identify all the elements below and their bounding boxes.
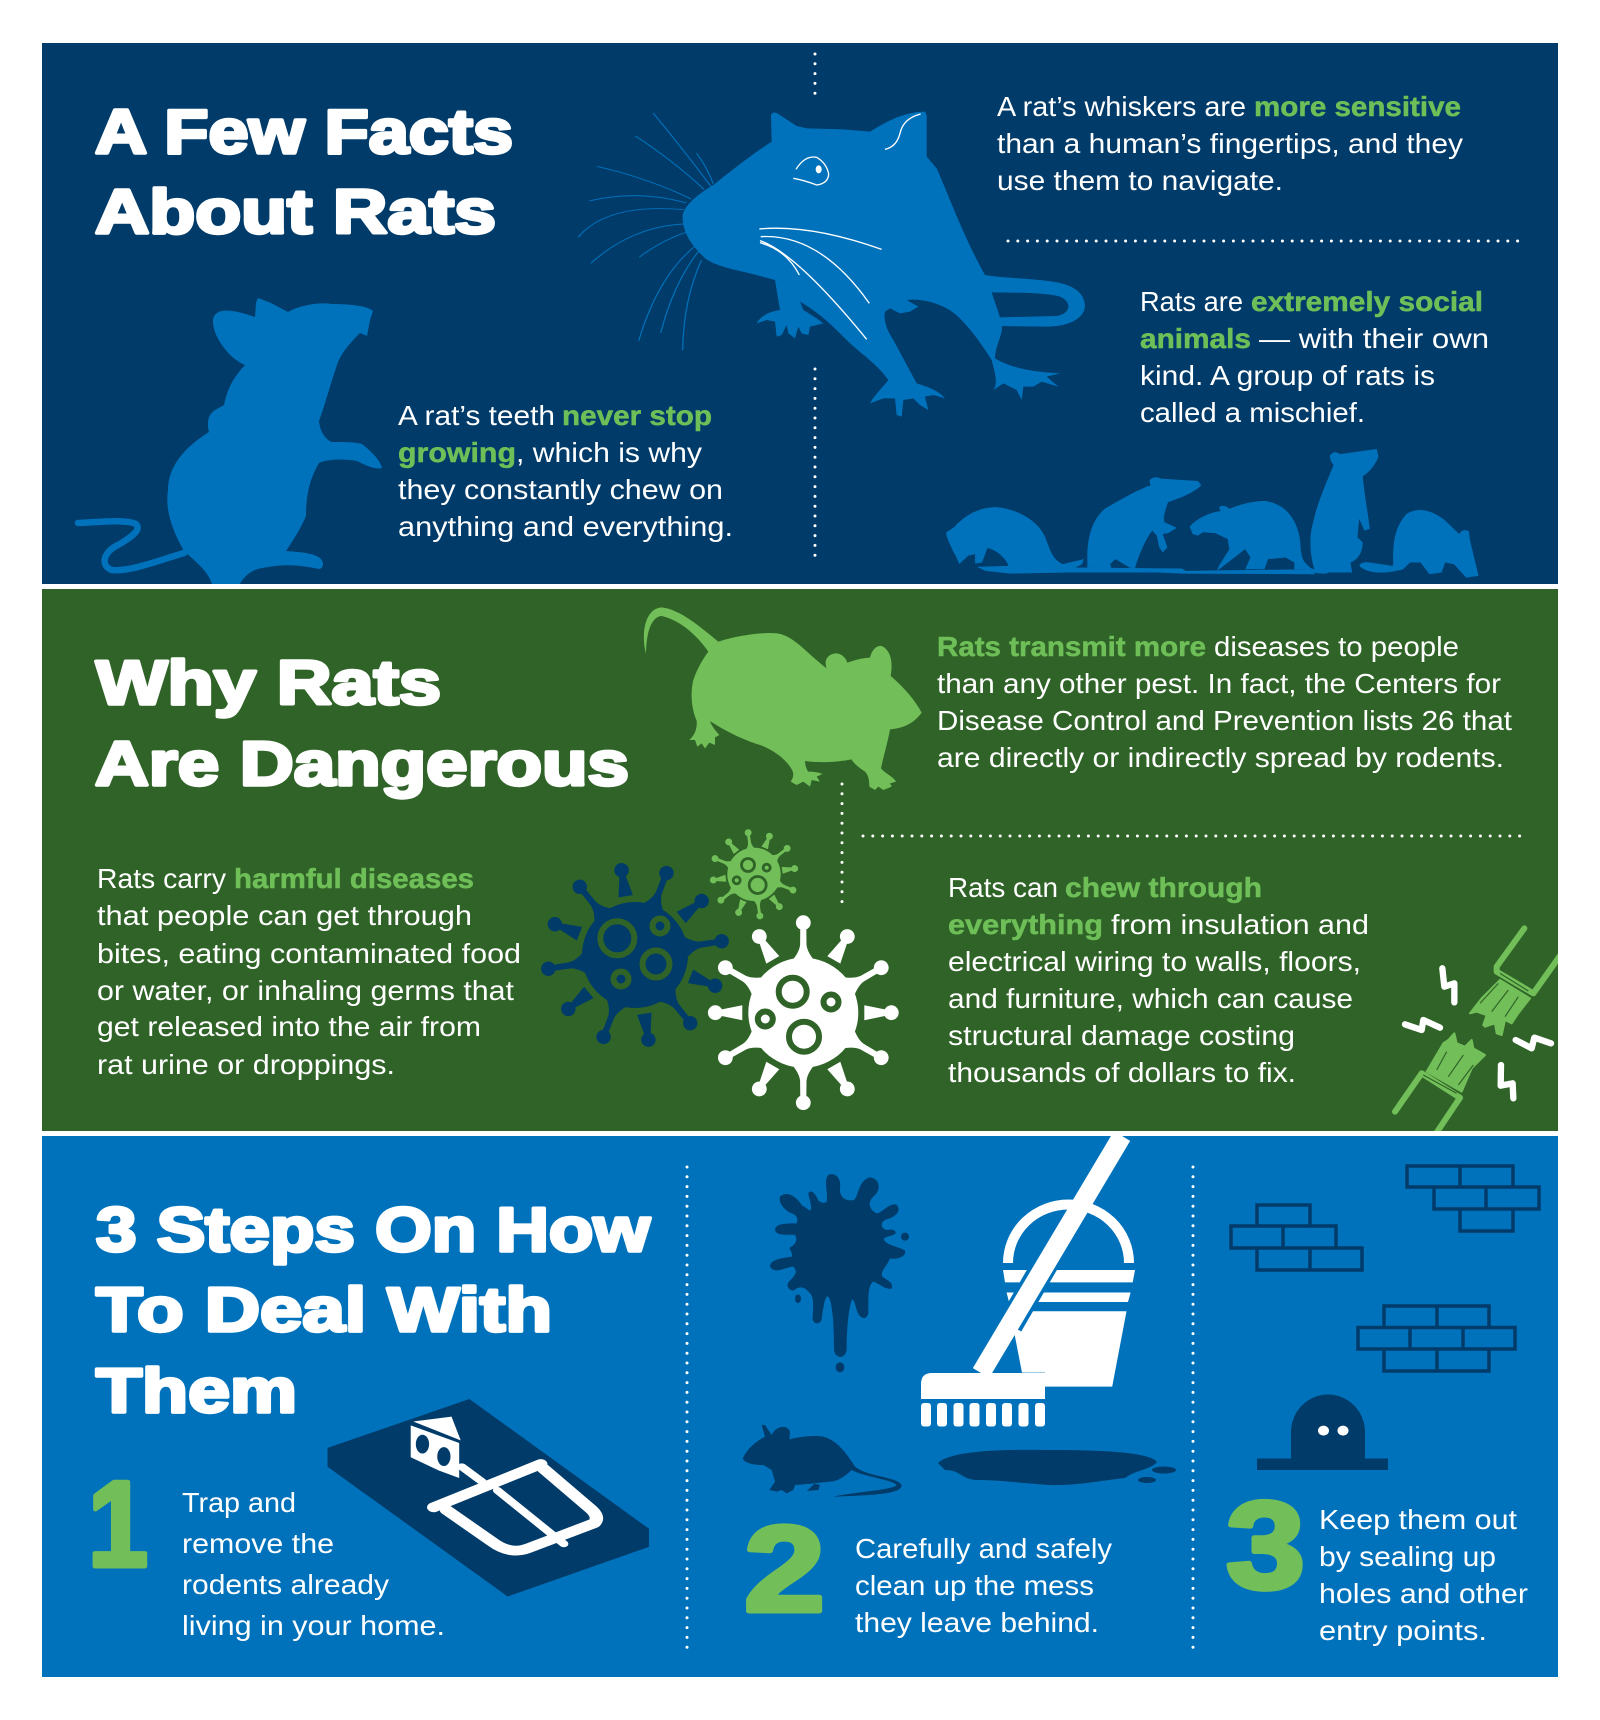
text: harmful diseases <box>97 863 521 1080</box>
icon: dark virus <box>514 833 756 1077</box>
text: social fact <box>1140 286 1489 428</box>
icon: dark mouse <box>743 1425 902 1497</box>
text: step 3: entry points. <box>1319 1615 1487 1646</box>
panel: why rats are dangerous <box>42 589 1562 1135</box>
icon: bricks center <box>1358 1306 1515 1371</box>
icon: bricks top right <box>1407 1166 1539 1231</box>
text: harmful diseases: that people can get through <box>97 900 472 931</box>
text: whiskers fact <box>997 91 1463 196</box>
number 3: 3 <box>1226 1477 1305 1615</box>
heading: Why Rats Are Dangerous: Why Rats <box>96 649 441 718</box>
text: teeth fact <box>398 400 733 542</box>
text: social fact: Rats are <box>1140 286 1243 317</box>
text: chew through <box>948 872 1369 1088</box>
text: whiskers fact: than a human’s fingertips, and they <box>997 128 1463 159</box>
text: step 1: Trap and <box>182 1487 296 1518</box>
icon: puddle <box>938 1450 1176 1485</box>
heading: 3 Steps On How To Deal With Them: 3 Steps On How <box>96 1196 651 1265</box>
text: whiskers fact: A rat’s whiskers are <box>997 91 1246 122</box>
text: step 3: by sealing up <box>1319 1541 1496 1572</box>
text: teeth fact: they constantly chew on <box>398 474 723 505</box>
number 1: 1 <box>88 1456 148 1592</box>
text: step 2 <box>855 1533 1112 1638</box>
text: harmful diseases: get released into the air from <box>97 1011 481 1042</box>
icon: paint splat <box>770 1174 909 1372</box>
icon: small green virus <box>704 823 804 926</box>
icon: standing rat silhouette <box>78 298 382 584</box>
text: teeth fact: A rat’s teeth <box>398 400 555 431</box>
icon: green rat <box>644 607 922 790</box>
text: harmful diseases: bites, eating contaminated food <box>97 938 521 969</box>
text: social fact: animals <box>1140 323 1251 354</box>
text: chew through: from insulation and <box>1111 909 1369 940</box>
text: step 3: holes and other <box>1319 1578 1528 1609</box>
icon: bricks left <box>1231 1205 1362 1270</box>
trap bar <box>434 1464 596 1551</box>
panel: a few facts about rats <box>42 43 1558 584</box>
text: harmful diseases: Rats carry <box>97 863 226 894</box>
icon: chewed wires with sparks <box>1395 928 1562 1135</box>
text: diseases fact: diseases to people <box>1214 631 1459 662</box>
text: step 3 <box>1319 1504 1528 1646</box>
heading: 3 Steps On How To Deal With Them: Them <box>96 1357 297 1426</box>
text: diseases fact: than any other pest. In fact, the Centers for <box>937 668 1501 699</box>
divider: dotted lines <box>842 784 1522 910</box>
heading: A Few Facts About Rats: A Few Facts <box>95 98 513 167</box>
text: diseases fact <box>937 631 1512 773</box>
heading: A Few Facts About Rats <box>95 98 513 247</box>
text: chew through: Rats can <box>948 872 1058 903</box>
text: step 1 <box>182 1487 445 1641</box>
heading: 3 Steps On How To Deal With Them <box>96 1196 651 1426</box>
text: teeth fact: growing <box>398 437 516 468</box>
text: step 2: Carefully and safely <box>855 1533 1112 1564</box>
text: social fact: — with their own <box>1259 323 1489 354</box>
number 2: 2 <box>744 1501 825 1637</box>
text: step 1: living in your home. <box>182 1610 445 1641</box>
icon: group of five rats <box>946 449 1478 578</box>
text: harmful diseases: rat urine or droppings. <box>97 1049 395 1080</box>
blue whiskers <box>578 113 713 350</box>
heading: 3 Steps On How To Deal With Them: To Deal With <box>96 1276 552 1345</box>
icon: mouse trap <box>328 1399 649 1596</box>
bristles <box>921 1403 1045 1426</box>
text: teeth fact: never stop <box>562 400 712 431</box>
divider: vertical dotted lines <box>815 54 1524 558</box>
icon: white virus <box>708 915 899 1110</box>
icon: rat hole with eyes <box>1257 1395 1388 1470</box>
text: diseases fact: are directly or indirectly spread by rodents. <box>937 742 1504 773</box>
text: chew through: thousands of dollars to fix. <box>948 1057 1296 1088</box>
heading: Why Rats Are Dangerous <box>95 649 629 799</box>
text: diseases fact: Rats transmit more <box>937 631 1206 662</box>
rat body <box>683 112 1085 417</box>
text: harmful diseases: harmful diseases <box>234 863 474 894</box>
text: step 1: remove the <box>182 1528 334 1559</box>
text: chew through: structural damage costing <box>948 1020 1295 1051</box>
text: whiskers fact: more sensitive <box>1254 91 1461 122</box>
icon: bucket and broom <box>921 1136 1135 1426</box>
icon: big rat with whiskers <box>578 112 1085 417</box>
text: diseases fact: Disease Control and Prevention lists 26 that <box>937 705 1512 736</box>
text: harmful diseases: or water, or inhaling germs that <box>97 975 514 1006</box>
divider: dotted lines <box>687 1167 1193 1651</box>
text: step 2: they leave behind. <box>855 1607 1099 1638</box>
text: social fact: extremely social <box>1251 286 1483 317</box>
text: step 3: Keep them out <box>1319 1504 1517 1535</box>
text: chew through: everything <box>948 909 1103 940</box>
text: social fact: kind. A group of rats is <box>1140 360 1435 391</box>
text: whiskers fact: use them to navigate. <box>997 165 1283 196</box>
text: teeth fact: , which is why <box>516 437 702 468</box>
cheese <box>411 1417 461 1478</box>
text: step 2: clean up the mess <box>855 1570 1094 1601</box>
heading: A Few Facts About Rats: About Rats <box>95 178 496 247</box>
text: chew through: and furniture, which can cause <box>948 983 1353 1014</box>
heading: Why Rats Are Dangerous: Are Dangerous <box>95 730 629 799</box>
text: chew through: electrical wiring to walls, floors, <box>948 946 1361 977</box>
text: step 1: rodents already <box>182 1569 389 1600</box>
text: teeth fact: anything and everything. <box>398 511 733 542</box>
panel: 3 steps on how to deal with them <box>42 1136 1558 1677</box>
text: social fact: called a mischief. <box>1140 397 1365 428</box>
text: chew through: chew through <box>1065 872 1262 903</box>
